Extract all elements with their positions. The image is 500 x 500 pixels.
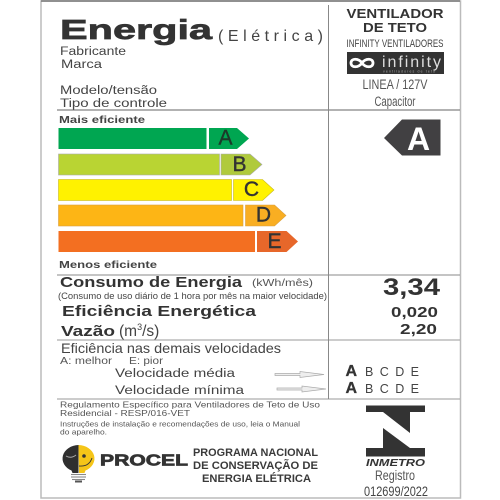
class E bar [58,230,298,253]
energy efficiency [62,304,438,321]
consumption: (Consumo de uso diário de 1 hora por mês na maior velocidade) [58,291,327,301]
consumption [58,274,441,301]
other speeds efficiency: Velocidade média [115,368,236,380]
product values: DE TETO [363,20,427,35]
procel programme name: DE CONSERVAÇÃO DE [193,459,318,472]
infinity logo [347,52,444,74]
regulation text: Instruções de instalação e recomendações de uso, leia o Manual [60,420,300,428]
title [60,14,323,45]
class D bar: D [256,204,271,226]
procel wordmark: PROCEL [100,452,188,470]
product values: INFINITY VENTILADORES [346,38,444,50]
infinity logo: infinity [382,54,441,71]
class D bar [58,204,286,226]
scale heading bottom: Menos eficiente [59,260,158,271]
regulation text [60,400,320,436]
consumption: 3,34 [383,274,441,301]
other speeds efficiency: Eficiência nas demais velocidades [61,340,281,356]
product field labels: Modelo/tensão [60,85,157,97]
arrow minimum speed [277,386,326,392]
rating indicator A: A [407,121,430,157]
registration number: Registro [375,467,415,483]
procel programme name: ENERGIA ELÉTRICA [202,472,311,485]
product values: Capacitor [374,94,416,109]
other speeds efficiency [60,340,281,397]
regulation text: Regulamento Específico para Ventiladores de Teto de Uso [60,400,320,410]
class B bar: B [232,153,247,176]
airflow: /s) [142,323,159,340]
procel programme name [193,447,318,485]
consumption: (kWh/mês) [252,278,313,289]
title: Energia [60,14,213,45]
energy efficiency: Eficiência Energética [62,304,257,320]
scale heading top: Mais eficiente [59,115,146,126]
medium speed classes: A [346,363,358,380]
airflow [61,321,437,340]
registration number [364,467,428,499]
class C bar: C [244,178,259,201]
consumption: Consumo de Energia [60,274,243,291]
icon: procel lamp [63,445,94,482]
minimum speed classes: A [346,380,358,397]
product field labels: Tipo de controle [60,98,167,110]
minimum speed classes: BCDE [365,382,419,396]
airflow: Vazão [61,323,115,340]
class A bar: A [218,126,233,150]
product values: LINEA / 127V [362,77,428,92]
other speeds efficiency: E: pior [129,356,164,367]
infinity logo: ventiladores de teto [383,70,435,74]
inmetro logo [366,406,425,469]
rating indicator A [384,120,440,157]
product field labels: Marca [61,59,103,71]
airflow: 3 [137,322,142,332]
regulation text: Residencial - RESP/016-VET [60,408,190,418]
medium speed classes [346,363,419,380]
procel programme name: PROGRAMA NACIONAL [193,447,318,459]
class C bar [58,178,274,201]
product values: VENTILADOR [346,6,444,21]
airflow: 2,20 [400,321,437,338]
regulation text: do aparelho. [60,428,107,436]
registration number: 012699/2022 [364,484,428,499]
product values [346,6,444,109]
inmetro logo: INMETRO [366,457,425,469]
product field labels: Fabricante [60,46,126,58]
efficiency scale [58,115,298,271]
energy efficiency: 0,020 [391,304,438,321]
airflow: (m [119,323,137,340]
class B bar [58,153,262,176]
title: (Elétrica) [218,28,323,45]
minimum speed classes [346,380,419,397]
medium speed classes: BCDE [365,365,419,379]
class E bar: E [267,230,282,253]
other speeds efficiency: Velocidade mínima [115,385,245,397]
arrow medium speed [275,372,324,378]
other speeds efficiency: A: melhor [60,356,113,367]
product field labels [60,46,167,110]
class A bar [58,126,249,150]
